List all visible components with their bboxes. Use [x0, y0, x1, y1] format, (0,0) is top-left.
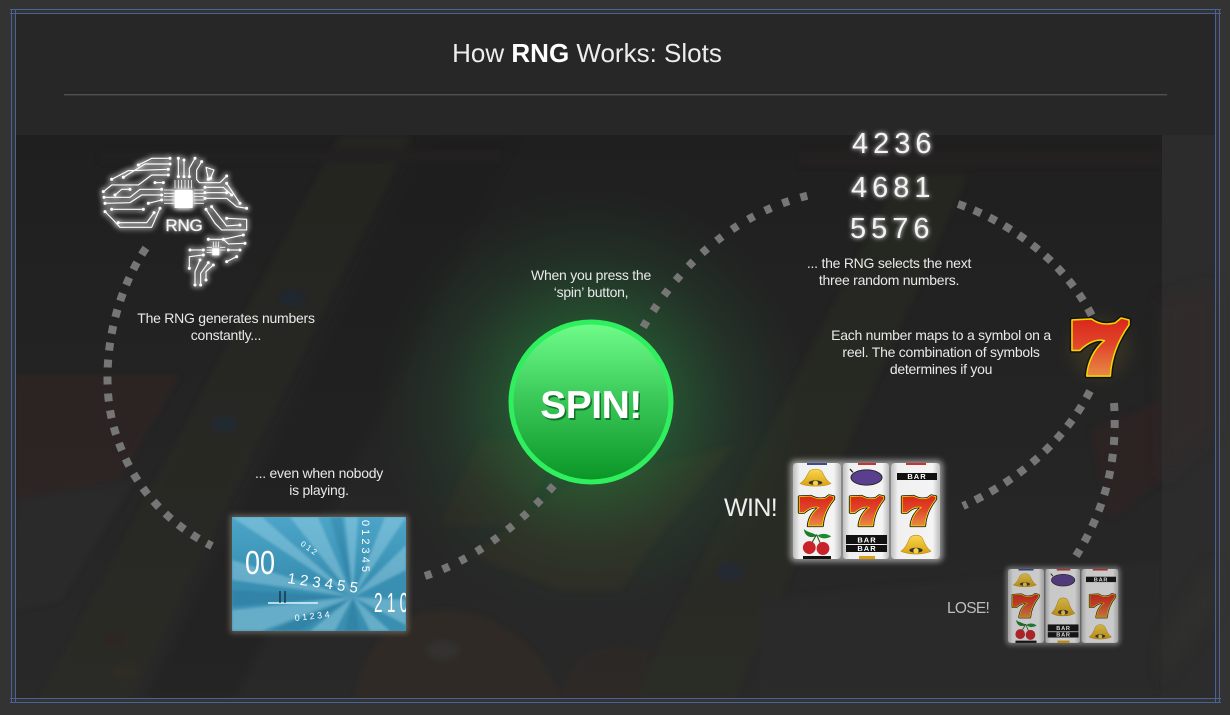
text: RNG generates numbers: The RNG generates numbers	[137, 310, 315, 326]
dotted path: left arc	[107, 248, 212, 546]
text: each number maps: Each number maps to a symbol on a	[831, 327, 1051, 343]
bar labels: BAR	[1056, 633, 1071, 639]
text: when you press spin: When you press the	[531, 267, 651, 283]
image digits: 2 1 0	[374, 587, 408, 618]
random numbers: 4681	[851, 172, 936, 204]
dotted path: to win	[963, 391, 1090, 506]
text: even when nobody is playing: ... even when nobody	[255, 465, 383, 481]
brain label: RNG	[165, 216, 203, 235]
reels: win	[790, 460, 943, 562]
title: How RNG Works: Slots	[452, 38, 722, 68]
bar labels: BAR	[857, 544, 877, 553]
image digits: 0 1 2 3 4 5	[359, 520, 371, 572]
dotted path: centre arc	[425, 194, 815, 576]
random numbers: 5576	[850, 213, 935, 245]
text: each number maps: reel. The combination of symbols	[842, 344, 1040, 360]
bar labels	[857, 472, 927, 553]
text: even when nobody is playing: is playing.	[289, 482, 349, 498]
image digits: 1 2 3 4 5 5	[286, 570, 359, 597]
bar labels: BAR	[1056, 626, 1071, 632]
spin label: SPIN!	[540, 384, 642, 427]
bar labels: BAR	[907, 472, 927, 481]
image digits	[245, 520, 408, 623]
green spin glow	[420, 230, 762, 572]
right side strip	[1162, 135, 1215, 698]
text: RNG generates numbers: constantly...	[191, 327, 261, 343]
image digits: 0 1 2 3 4	[294, 609, 330, 623]
random numbers	[850, 128, 937, 245]
image digits: 0 1 2	[299, 539, 319, 557]
text: RNG selects numbers: three random numbers.	[819, 272, 959, 288]
random numbers: 4236	[852, 128, 937, 160]
image: data tunnel	[230, 515, 408, 633]
bar labels: BAR	[1094, 577, 1108, 583]
dotted path: upper right arc	[958, 204, 1092, 316]
spin button	[511, 322, 671, 482]
reels: lose	[1006, 567, 1120, 645]
dotted path: to lose	[1076, 403, 1115, 556]
text: win: WIN!	[724, 494, 777, 522]
icon: lucky seven	[1070, 318, 1130, 378]
bar labels: BAR	[857, 536, 877, 544]
image digits: 00	[245, 546, 275, 582]
text: lose: LOSE!	[947, 600, 989, 617]
text: when you press spin: ‘spin’ button,	[554, 284, 628, 300]
text: each number maps: determines if you	[890, 361, 992, 377]
bar labels	[1056, 577, 1108, 639]
title divider	[64, 94, 1167, 95]
blurred slot machine background	[15, 135, 1162, 698]
text: RNG selects numbers: ... the RNG selects the next	[807, 255, 971, 271]
icon: circuit brain with RNG	[103, 158, 247, 285]
